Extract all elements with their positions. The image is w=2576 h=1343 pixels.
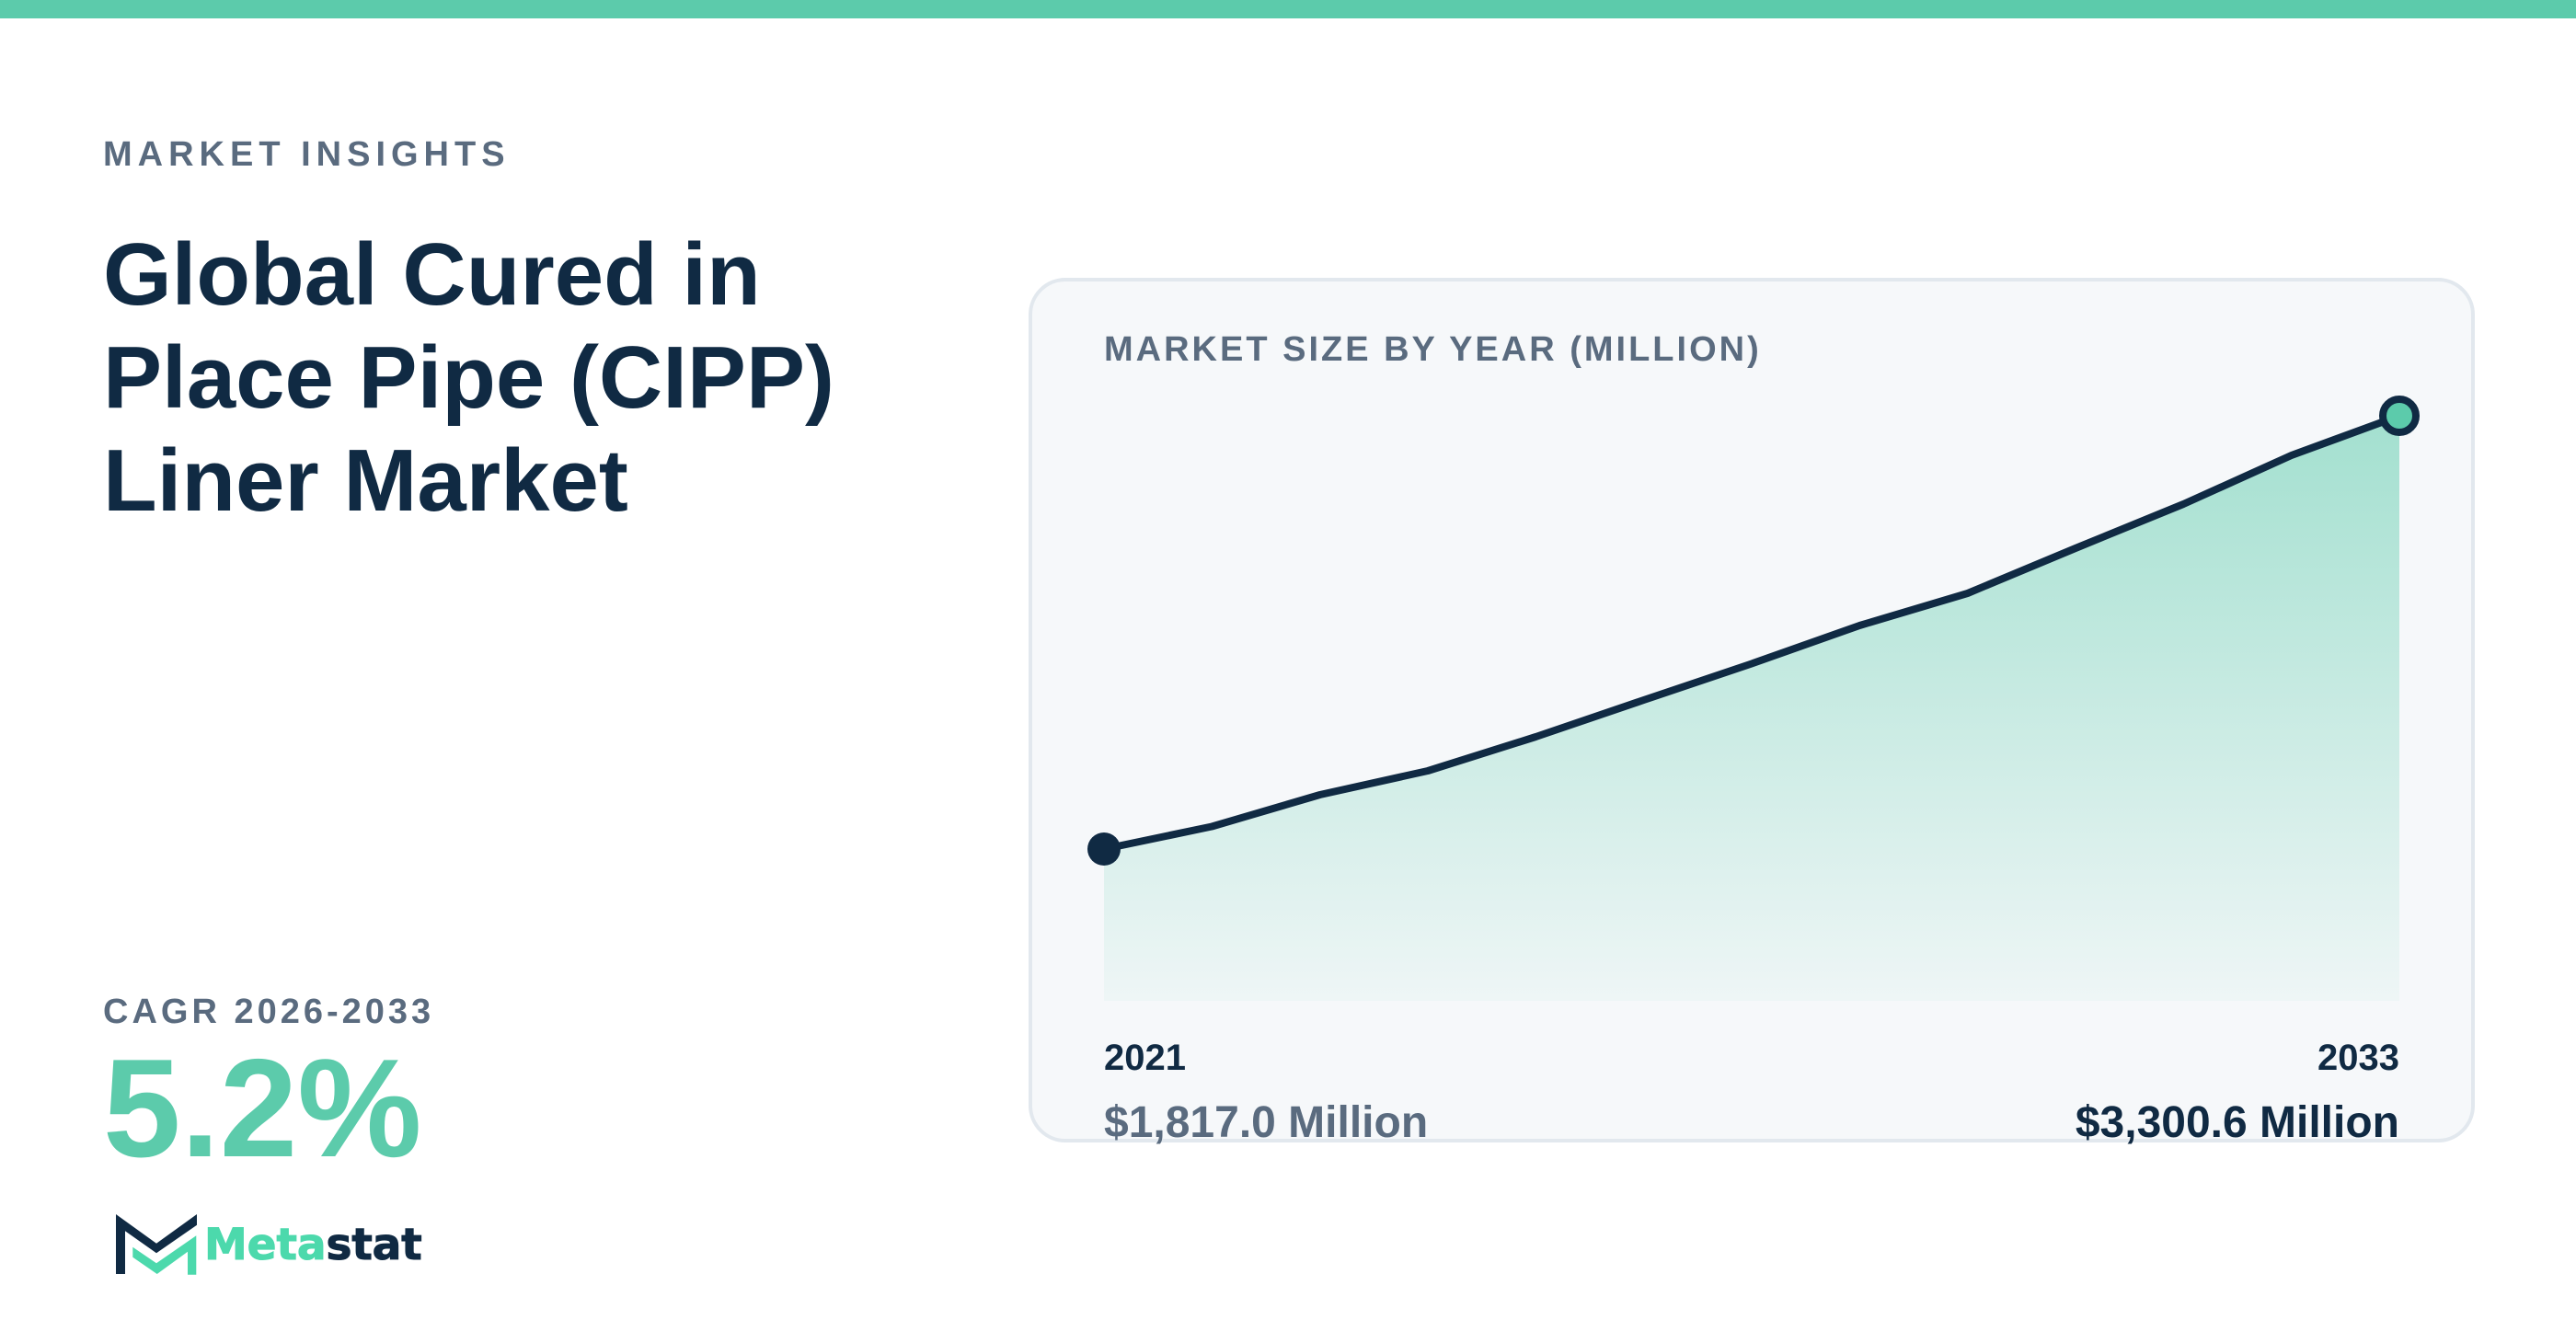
title: Global Cured in <box>103 225 761 324</box>
logo wordmark: Metastat <box>204 1220 422 1270</box>
CAGR label: CAGR 2026-2033 <box>103 993 434 1031</box>
end value: $3,300.6 Million <box>2076 1098 2399 1147</box>
eyebrow label: MARKET INSIGHTS <box>103 135 511 174</box>
panel: market size chart <box>1029 278 2475 1142</box>
end year: 2033 <box>2317 1038 2399 1078</box>
logo: Metastat <box>116 1214 422 1275</box>
title: Liner Market <box>103 431 628 530</box>
panel heading: MARKET SIZE BY YEAR (MILLION) <box>1104 330 1762 369</box>
icon: M mark <box>116 1214 197 1275</box>
title: Place Pipe (CIPP) <box>103 328 834 427</box>
title <box>103 225 834 530</box>
start value: $1,817.0 Million <box>1104 1098 1428 1147</box>
top accent bar <box>0 0 2576 18</box>
CAGR value: 5.2% <box>103 1030 421 1187</box>
start year: 2021 <box>1104 1038 1186 1078</box>
